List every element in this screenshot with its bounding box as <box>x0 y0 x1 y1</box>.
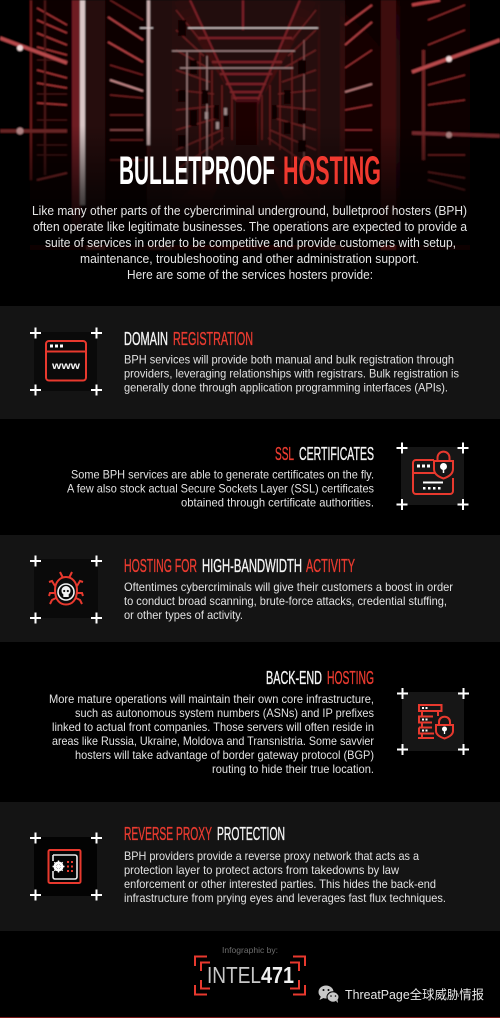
text block: such as autonomous system numbers (ASNs) and IP prefixes <box>75 706 374 720</box>
heading: PROTECTION <box>217 823 285 844</box>
heading <box>275 443 374 464</box>
text block: BPH providers provide a reverse proxy network that acts as a <box>124 849 419 863</box>
logo: intel 471: 471 <box>261 962 294 988</box>
text block: hosters will take advantage of border gateway protocol (BGP) <box>75 748 374 762</box>
intro paragraph: Like many other parts of the cybercriminal underground, bulletproof hosters (BPH) <box>32 203 467 218</box>
heading: REVERSE PROXY <box>124 823 212 844</box>
wall racks right <box>262 10 316 170</box>
right racks <box>345 50 372 150</box>
intro paragraph: Here are some of the services hosters provide: <box>127 267 373 282</box>
account name: ThreatPage全球威胁情报 <box>345 987 484 1002</box>
hero photo: server room corridor <box>0 0 500 250</box>
text block: or other types of activity. <box>124 608 243 622</box>
text block <box>124 580 453 622</box>
logo: intel 471: INTEL <box>207 962 261 988</box>
text block <box>49 692 374 776</box>
panel: back-end hosting <box>0 642 500 802</box>
text block <box>67 468 374 510</box>
icon: browser window www <box>30 328 102 396</box>
intro paragraph: often operate like legitimate businesses. The operations are expected to provide a <box>33 219 468 234</box>
icon: bug with skull <box>30 556 102 624</box>
text block: areas like Russia, Ukraine, Moldova and Transnistria. Some savvier <box>52 734 374 748</box>
text block <box>124 849 446 905</box>
icon: wechat bubbles <box>318 986 339 1003</box>
second left rack <box>110 0 143 160</box>
watermark: wechat <box>318 986 484 1003</box>
heading: DOMAIN <box>124 328 168 349</box>
title: HOSTING <box>283 149 381 193</box>
heading: HOSTING <box>327 667 374 688</box>
bottom rule <box>0 1017 500 1018</box>
intro paragraph: suite of services in order to be competitive and provide customers with setup, <box>45 235 456 250</box>
text block: generally done through application programming interfaces (APIs). <box>124 380 448 394</box>
panel: ssl certificates <box>0 419 500 535</box>
logo: intel 471 <box>195 956 305 994</box>
text block <box>124 352 459 394</box>
icon: certificate with lock <box>396 442 468 510</box>
text block: A few also stock actual Secure Sockets Layer (SSL) certificates <box>67 482 374 496</box>
title: BULLETPROOF <box>119 149 275 193</box>
intro paragraph: maintenance, troubleshooting and other administration support. <box>80 251 419 266</box>
heading: HIGH-BANDWIDTH <box>202 555 302 576</box>
text block: infrastructure from prying eyes and leverages fast flux techniques. <box>124 891 446 905</box>
text block: enforcement or other interested parties. This hides the back-end <box>124 877 436 891</box>
heading <box>124 555 355 576</box>
wall racks left <box>176 10 232 170</box>
panel: domain registration <box>0 306 500 419</box>
text block: Some BPH services are able to generate certificates on the fly. <box>71 468 374 482</box>
text block: linked to actual front companies. Those servers will often reside in <box>52 720 374 734</box>
intro paragraph <box>32 203 468 282</box>
white horizontals <box>140 27 318 29</box>
text block: More mature operations will maintain their own core infrastructure, <box>49 692 374 706</box>
icon: servers with lock <box>397 688 469 755</box>
panel: reverse proxy protection <box>0 802 500 931</box>
ceiling beams <box>198 0 292 98</box>
icon: browser window www: www <box>51 360 81 372</box>
heading <box>124 328 253 349</box>
panel: hosting for high-bandwidth activity <box>0 535 500 642</box>
caption: Infographic by: <box>222 945 278 955</box>
heading: BACK-END <box>266 667 322 688</box>
text block: providers, leveraging relationships with registrars. Bulk registration is <box>124 366 459 380</box>
text block: BPH services will provide both manual and bulk registration through <box>124 352 454 366</box>
heading: CERTIFICATES <box>299 443 374 464</box>
footer credit <box>195 945 305 994</box>
heading: REGISTRATION <box>173 328 253 349</box>
text block: Oftentimes cybercriminals will give their customers a boost in order <box>124 580 453 594</box>
far left rack shelves <box>37 8 67 180</box>
heading: ACTIVITY <box>306 555 355 576</box>
text block: obtained through certificate authorities. <box>181 496 374 510</box>
icon: vault with gear <box>30 832 102 900</box>
heading: HOSTING FOR <box>124 555 197 576</box>
text block: routing to hide their true location. <box>212 762 374 776</box>
corridor walls <box>172 0 238 205</box>
text block: protection layer to protect actors from takedowns by law <box>124 863 399 877</box>
heading: SSL <box>275 443 294 464</box>
bright beams <box>0 38 67 63</box>
text block: to conduct broad scanning, brute-force attacks, credential stuffing, <box>124 594 447 608</box>
